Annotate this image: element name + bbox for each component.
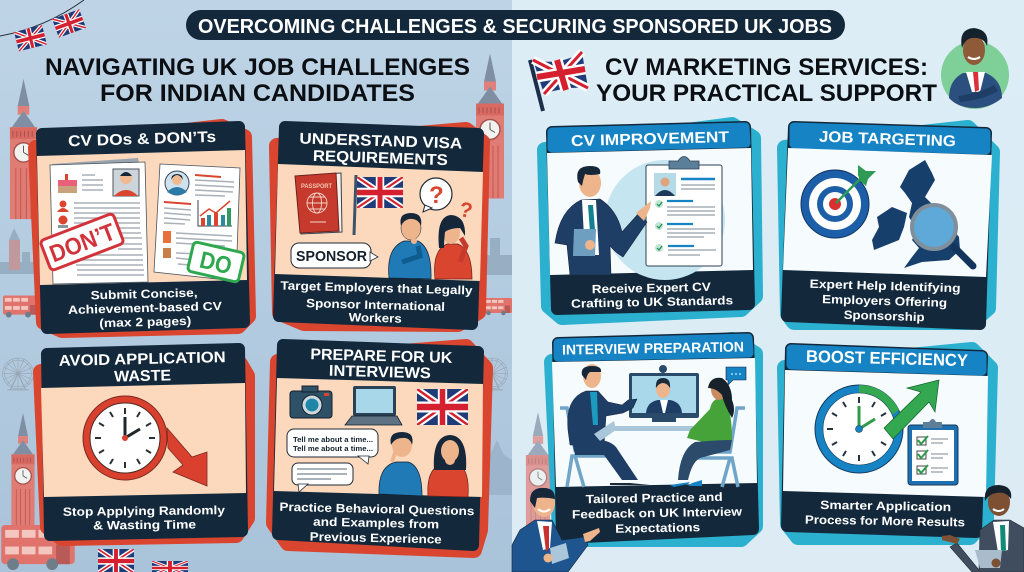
- background: right panel: [512, 0, 1024, 572]
- heading: WASTE: [114, 367, 171, 386]
- icon: large UK flag: [530, 52, 588, 111]
- heading: AVOID APPLICATION: [59, 349, 226, 370]
- sponsor bubble: [291, 243, 378, 268]
- caption: Achievement-based CV: [68, 299, 222, 317]
- caption: Employers Offering: [822, 292, 947, 310]
- figure: worried woman: [428, 435, 468, 497]
- heading: [310, 346, 453, 383]
- heading: REQUIREMENTS: [313, 148, 448, 169]
- icon: presenter with arms crossed: [941, 28, 1009, 109]
- figure: presenter bottom left: [512, 488, 600, 572]
- illustration: presenter and CV clipboard: [555, 156, 725, 280]
- panel: Job targeting: [783, 127, 992, 325]
- caption: Process for More Results: [805, 513, 965, 529]
- icon: clock with rising arrow: [815, 380, 939, 473]
- figure: worried man: [379, 432, 422, 496]
- panel: CV DOs and DON'Ts: [36, 127, 248, 331]
- right heading: YOUR PRACTICAL SUPPORT: [596, 80, 937, 107]
- icon: camera: [290, 386, 332, 418]
- icon: UK flag: [417, 389, 468, 425]
- heading: UNDERSTAND VISA: [299, 130, 463, 153]
- illustration: good CV: [154, 164, 240, 281]
- stamp: DO: DO: [197, 247, 234, 280]
- icon: target and dart: [801, 165, 876, 238]
- icon: question bubbles: ?: [458, 198, 474, 223]
- icon: question bubbles: [420, 178, 474, 223]
- heading: BOOST EFFICIENCY: [806, 347, 969, 370]
- stamp: DON'T: DON’T: [46, 219, 119, 268]
- caption: [63, 503, 225, 533]
- figure: presenter bottom right: [942, 485, 1024, 572]
- panel: Interview preparation: [552, 338, 757, 539]
- caption: and Examples from: [313, 515, 439, 531]
- panel: Avoid application waste: [41, 349, 247, 538]
- caption: (max 2 pages): [99, 314, 191, 330]
- right heading: [596, 54, 937, 107]
- heading: CV IMPROVEMENT: [571, 129, 730, 150]
- caption: [571, 279, 734, 311]
- heading: [59, 349, 226, 387]
- speech bubble: tell me about a time: [287, 429, 378, 464]
- figure: confused woman: [434, 215, 472, 279]
- figure: confused man: [389, 213, 431, 279]
- panel: Boost efficiency: [783, 347, 990, 537]
- icon: UK map with magnifier: [872, 160, 973, 268]
- icon: laptop: [345, 386, 402, 425]
- caption: Smarter Application: [820, 498, 951, 514]
- speech bubble: reply: [292, 463, 353, 492]
- caption: Practice Behavioral Questions: [279, 500, 475, 518]
- caption: [572, 490, 743, 536]
- background: left panel: [0, 0, 512, 572]
- caption: Stop Applying Randomly: [63, 503, 225, 519]
- speech bubble: tell me about a time: Tell me about a time...: [293, 444, 373, 453]
- icon: clock with falling arrow: [83, 396, 207, 486]
- heading: INTERVIEWS: [329, 363, 431, 382]
- right panel Big Ben: [526, 412, 550, 537]
- caption: Sponsorship: [843, 308, 925, 324]
- bottom left small flags: [98, 549, 188, 572]
- right heading: CV MARKETING SERVICES:: [605, 54, 928, 81]
- left heading: NAVIGATING UK JOB CHALLENGES: [45, 54, 470, 81]
- icon: checklist clipboard: [908, 419, 958, 485]
- panel: Understand visa requirements: [275, 127, 483, 328]
- heading: INTERVIEW PREPARATION: [562, 338, 744, 358]
- illustration: bad CV: [50, 158, 148, 284]
- left panel London scenery: [0, 54, 512, 570]
- caption: Expert Help Identifying: [809, 277, 961, 295]
- heading: JOB TARGETING: [819, 129, 956, 150]
- icon: question bubbles: ?: [429, 182, 444, 209]
- caption: [279, 500, 475, 547]
- illustration: video interview scene: [560, 364, 746, 487]
- caption: Crafting to UK Standards: [571, 293, 734, 311]
- caption: Workers: [349, 310, 402, 326]
- left heading: FOR INDIAN CANDIDATES: [100, 80, 415, 107]
- caption: [805, 498, 966, 529]
- left heading: [45, 54, 470, 107]
- caption: Feedback on UK Interview: [572, 505, 743, 521]
- caption: Receive Expert CV: [592, 280, 711, 296]
- caption: [67, 285, 222, 331]
- heading: [299, 130, 463, 170]
- sponsor bubble: SPONSOR: [296, 248, 367, 265]
- icon: passport: PASSPORT: [301, 183, 332, 190]
- heading: CV DOs & DON’Ts: [68, 129, 216, 150]
- stamp: DO: [187, 242, 245, 282]
- caption: Tailored Practice and: [586, 490, 723, 506]
- caption: [280, 278, 473, 328]
- bunting flags: [0, 0, 86, 51]
- panel: CV improvement: [545, 125, 755, 317]
- panel: Prepare for UK interviews: [274, 345, 485, 550]
- caption: Sponsor International: [306, 296, 445, 314]
- caption: & Wasting Time: [93, 517, 196, 533]
- caption: Target Employers that Legally: [280, 278, 473, 298]
- title banner: OVERCOMING CHALLENGES & SECURING SPONSORED UK JOBS: [198, 16, 832, 38]
- caption: [808, 277, 961, 325]
- caption: Expectations: [615, 520, 701, 536]
- speech bubble: tell me about a time: Tell me about a time...: [293, 435, 373, 444]
- caption: Previous Experience: [310, 530, 442, 547]
- caption: Submit Concise,: [90, 286, 198, 302]
- heading: PREPARE FOR UK: [310, 346, 453, 367]
- icon: passport: [295, 173, 342, 234]
- icon: UK flag on pole: [354, 175, 403, 235]
